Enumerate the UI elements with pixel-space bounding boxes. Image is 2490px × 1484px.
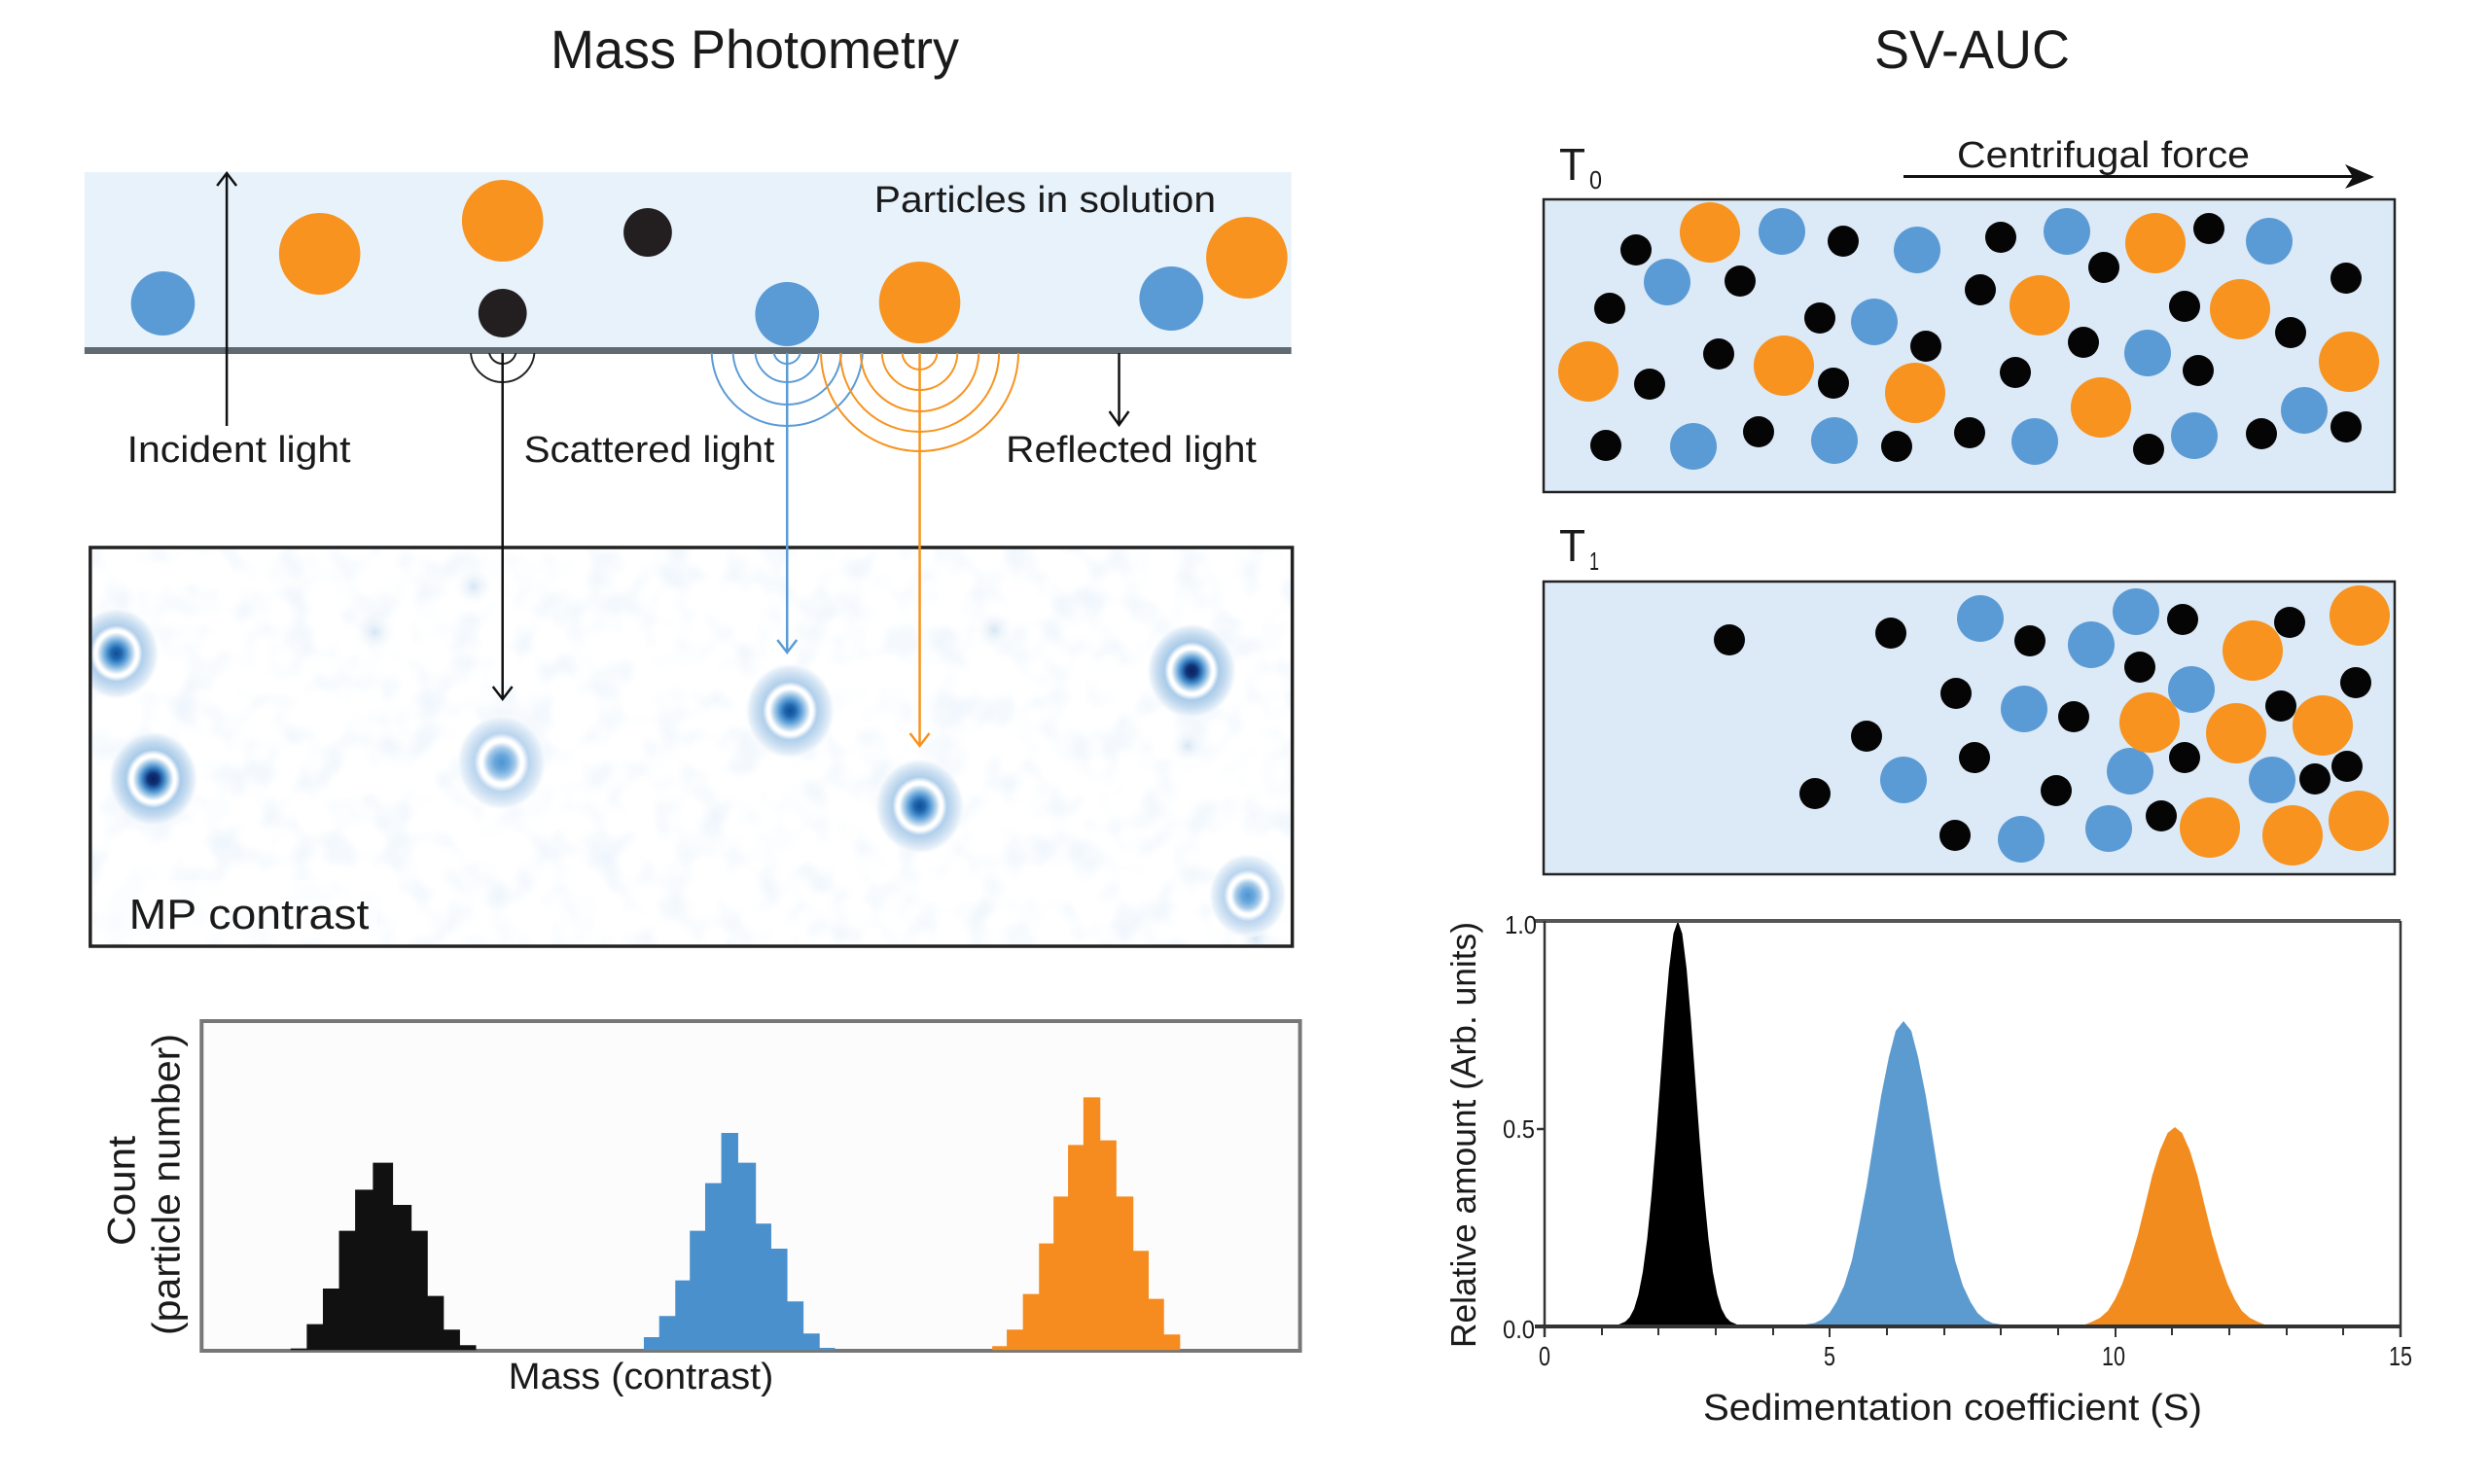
panel: T0 [1544, 199, 2395, 492]
peak: black [1608, 921, 1748, 1326]
label: scattered light: Scattered light [524, 430, 775, 471]
x tick labels: 15 [2389, 1341, 2412, 1371]
label: incident light: Incident light [127, 430, 351, 471]
panel: MP contrast image [73, 548, 1293, 958]
y tick labels: 0.0 [1503, 1315, 1535, 1344]
arrow: incident light [217, 173, 236, 426]
contrast spots [73, 565, 1288, 958]
x tick labels [1539, 1341, 2412, 1371]
orange particles T0 [1558, 202, 2379, 438]
particles [131, 180, 1288, 346]
peak: blue [1785, 1021, 2022, 1326]
orange particles T1 [2119, 585, 2390, 866]
histogram: black [291, 1163, 476, 1350]
black particles T1 [1714, 604, 2371, 851]
ripples: scattered light orange [820, 353, 1019, 452]
title: SV-AUC: SV-AUC [1874, 18, 2070, 80]
black particles T0 [1590, 213, 2362, 465]
ripples: scattered light blue [710, 353, 864, 427]
label: particles in solution: Particles in solution [874, 180, 1216, 221]
panel: T1 [1544, 582, 2395, 874]
label: MP contrast: MP contrast [129, 891, 369, 938]
label backing [97, 880, 377, 943]
frame [90, 548, 1293, 946]
label: T0: T [1559, 139, 1585, 190]
chart: mass histogram [101, 1021, 1300, 1397]
axes frame [1535, 921, 2401, 1337]
y-axis label: count: Count [101, 1136, 144, 1246]
label: T1 [1559, 520, 1599, 576]
title: Mass Photometry: Mass Photometry [551, 18, 959, 80]
x tick labels: 0 [1539, 1341, 1550, 1371]
label: centrifugal force: Centrifugal force [1957, 135, 2250, 176]
y-axis label: particle number: (particle number) [145, 1034, 188, 1335]
label: T0 [1559, 139, 1602, 194]
label: T0: 0 [1589, 165, 1602, 194]
panel: particles in solution [85, 172, 1292, 354]
chart: sedimentation coefficient distribution [1443, 910, 2412, 1429]
ripples: scattered light black [470, 353, 535, 383]
blue particles T1 [1880, 588, 2295, 863]
histogram: orange [992, 1097, 1180, 1350]
x-axis label: mass: Mass (contrast) [509, 1357, 773, 1397]
x-axis label: Sedimentation coefficient (S) [1703, 1388, 2202, 1429]
label: reflected light: Reflected light [1006, 430, 1257, 471]
label: T1: T [1559, 520, 1585, 571]
y tick labels: 1.0 [1505, 910, 1537, 939]
label: T1: 1 [1589, 547, 1599, 576]
y-axis label: Relative amount (Arb. units) [1443, 922, 1483, 1348]
x tick labels: 5 [1824, 1341, 1835, 1371]
y tick labels: 0.5 [1503, 1114, 1535, 1144]
arrow: centrifugal force [1903, 164, 2374, 189]
y tick labels [1503, 910, 1537, 1344]
section: mass photometry diagram [73, 172, 1300, 1397]
blue particles T0 [1644, 208, 2328, 470]
arrow: orange scattered [910, 353, 930, 746]
x tick labels: 10 [2102, 1341, 2125, 1371]
surface bar [85, 347, 1292, 354]
histogram: blue [644, 1133, 835, 1350]
arrow: blue scattered [777, 353, 797, 653]
peak: orange [2055, 1127, 2294, 1326]
arrow: reflected light [1110, 353, 1128, 425]
arrow: black scattered [493, 353, 513, 699]
